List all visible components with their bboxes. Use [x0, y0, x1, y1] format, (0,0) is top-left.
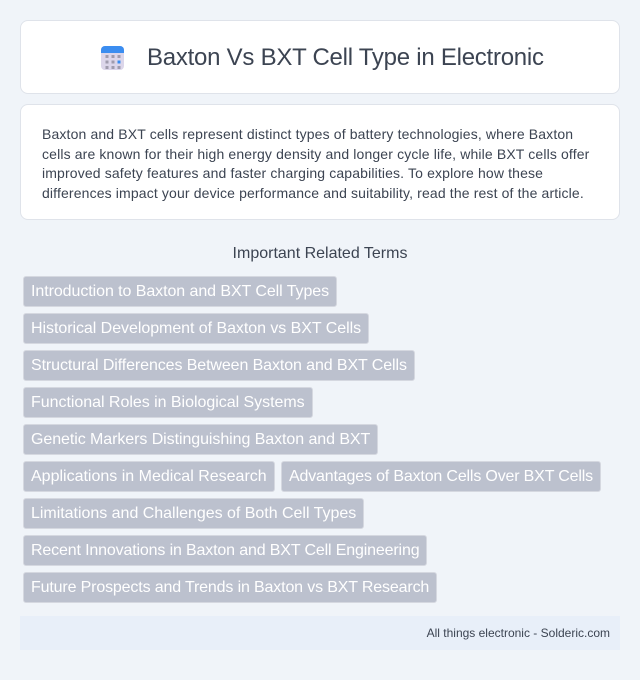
header card	[20, 20, 620, 94]
tag: Limitations and Challenges of Both Cell Types	[31, 505, 356, 522]
tag	[23, 276, 337, 307]
tag: Recent Innovations in Baxton and BXT Cell Engineering	[31, 542, 419, 559]
footer bar	[20, 616, 620, 650]
tag	[23, 387, 313, 418]
intro text panel	[20, 104, 620, 220]
tag list	[23, 276, 601, 603]
tag: Advantages of Baxton Cells Over BXT Cells	[289, 468, 593, 485]
tag: Applications in Medical Research	[31, 468, 267, 485]
section heading: Important Related Terms	[233, 245, 407, 262]
tag	[23, 350, 415, 381]
tag	[23, 313, 369, 344]
title: Baxton Vs BXT Cell Type in Electronic	[147, 44, 544, 71]
icon: calendar	[101, 46, 124, 70]
intro paragraph	[42, 126, 590, 201]
tag: Future Prospects and Trends in Baxton vs BXT Research	[31, 579, 429, 596]
tag: Genetic Markers Distinguishing Baxton and BXT	[31, 431, 370, 448]
intro paragraph: differences impact your device performance and suitability, read the rest of the article.	[42, 185, 584, 201]
tag	[281, 461, 601, 492]
intro paragraph: improved safety features and faster charging capabilities. To explore how these	[42, 165, 543, 181]
tag	[23, 424, 378, 455]
tag: Introduction to Baxton and BXT Cell Types	[31, 283, 329, 300]
intro paragraph: cells are known for their high energy density and longer cycle life, while BXT cells offer	[42, 146, 589, 162]
footer text: All things electronic - Solderic.com	[427, 626, 610, 640]
tag	[23, 572, 437, 603]
tag	[23, 461, 275, 492]
tag	[23, 535, 427, 566]
intro paragraph: Baxton and BXT cells represent distinct types of battery technologies, where Baxton	[42, 126, 573, 142]
tag: Functional Roles in Biological Systems	[31, 394, 305, 411]
tag: Historical Development of Baxton vs BXT Cells	[31, 320, 361, 337]
tag: Structural Differences Between Baxton and BXT Cells	[31, 357, 407, 374]
tag	[23, 498, 364, 529]
